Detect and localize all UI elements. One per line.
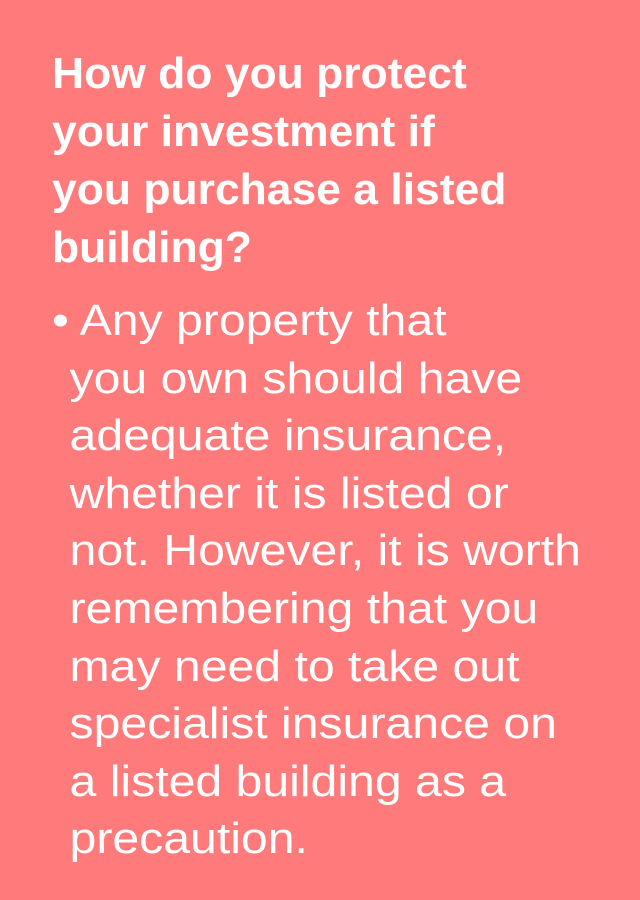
text block: bullet paragraph: may need to take out xyxy=(70,642,519,691)
text block: bullet paragraph xyxy=(52,296,581,863)
title: you purchase a listed xyxy=(52,165,506,214)
text block: bullet paragraph: whether it is listed or xyxy=(70,469,509,518)
title: How do you protect xyxy=(52,49,467,98)
text block: bullet paragraph: adequate insurance, xyxy=(70,411,506,460)
text block: bullet paragraph: precaution. xyxy=(70,814,308,863)
text block: bullet paragraph: • Any property that xyxy=(52,296,447,345)
text block: bullet paragraph: a listed building as a xyxy=(70,757,506,806)
title: your investment if xyxy=(52,107,435,156)
title: building? xyxy=(52,223,252,272)
text block: bullet paragraph: specialist insurance on xyxy=(70,699,557,748)
text block: bullet paragraph: remembering that you xyxy=(70,584,538,633)
title xyxy=(52,49,506,272)
text block: bullet paragraph: not. However, it is worth xyxy=(70,526,581,575)
text block: bullet paragraph: you own should have xyxy=(70,354,522,403)
